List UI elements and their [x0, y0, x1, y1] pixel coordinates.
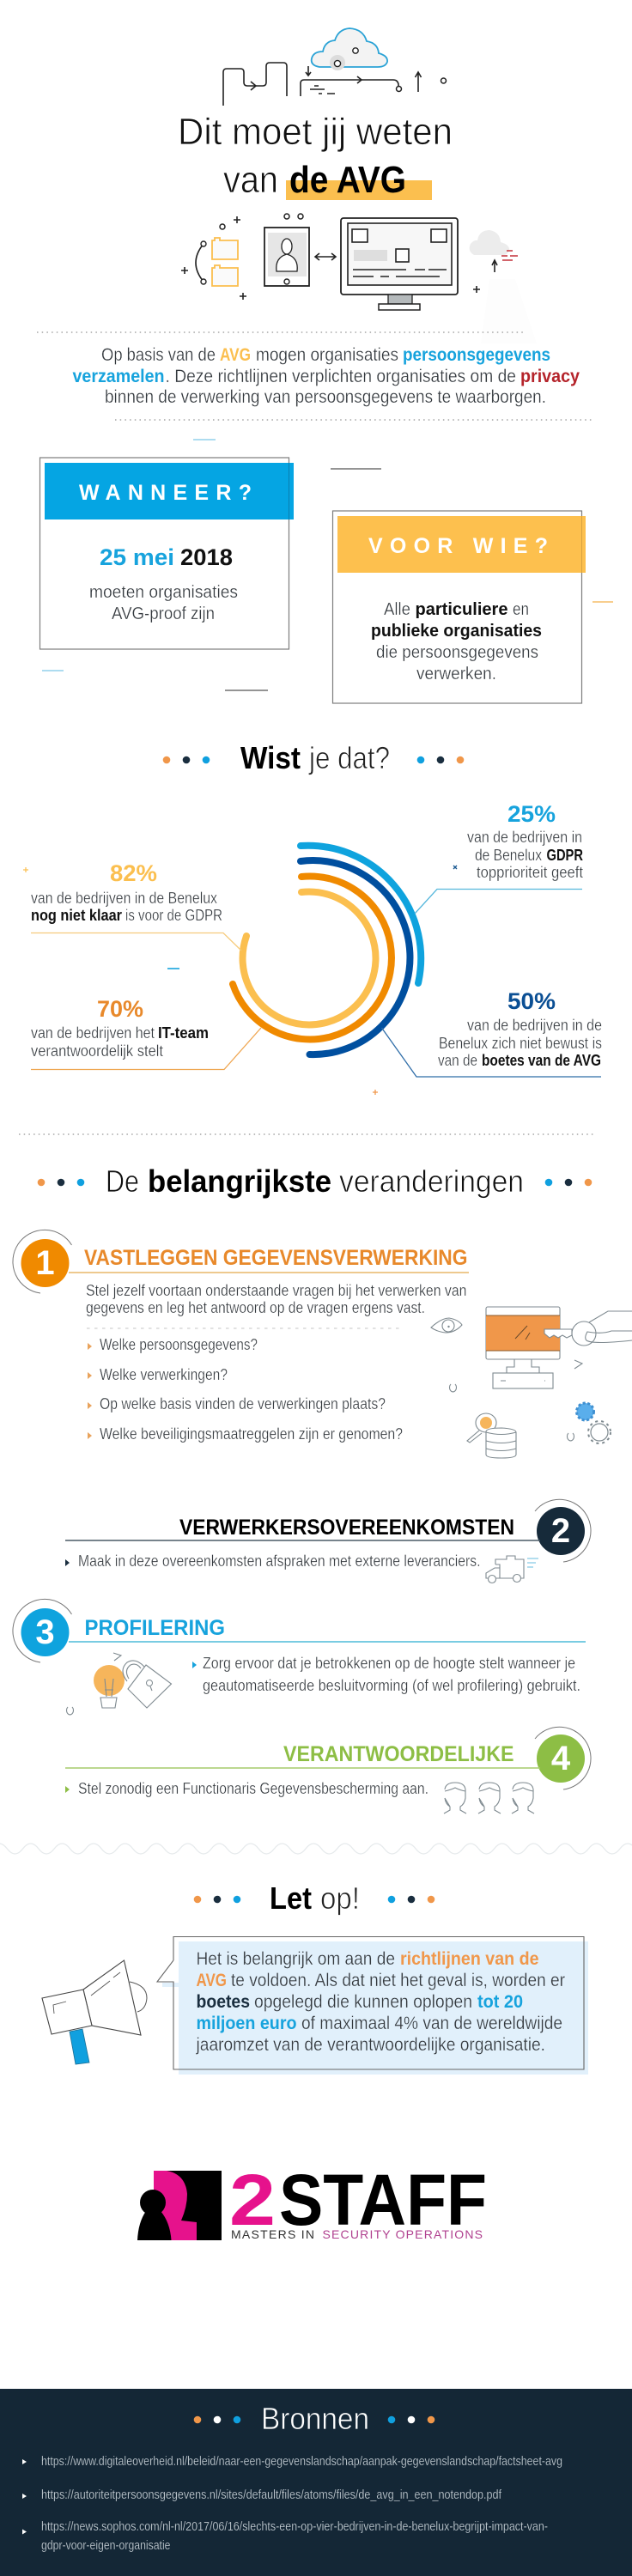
body text 3: geautomatiseerde besluitvorming (of wel profilering) gebruikt. — [203, 1677, 580, 1694]
badge 4: 4 — [551, 1740, 571, 1777]
decorative marks near chart — [23, 866, 457, 1095]
wanneer date: 25 mei — [100, 544, 174, 570]
heading 3: PROFILERING — [84, 1616, 225, 1640]
stat: 70% — [31, 996, 261, 1070]
icon: monitor with key — [486, 1307, 632, 1388]
question list: Welke beveiligingsmaatreggelen zijn er genomen? — [100, 1425, 403, 1443]
title: van — [223, 159, 278, 201]
voor wie text: die persoonsgegevens — [376, 643, 538, 662]
wanneer text — [89, 583, 238, 623]
wanneer header: WANNEER? — [79, 481, 252, 505]
heading: bronnen: Bronnen — [261, 2401, 369, 2436]
wanneer text: moeten organisaties — [89, 583, 238, 602]
heading: let op — [194, 1880, 434, 1916]
stat: 82%: nog niet klaar — [31, 907, 122, 924]
voor wie text — [371, 600, 542, 683]
title: Dit moet jij weten — [178, 111, 453, 153]
voor wie header — [337, 516, 586, 573]
logo wordmark: 2 — [229, 2160, 276, 2240]
intro text: verzamelen — [72, 367, 165, 386]
stat: 70%: verantwoordelijk stelt — [31, 1042, 163, 1060]
heading: bronnen — [194, 2401, 434, 2436]
voor wie text: Alle — [384, 600, 410, 619]
heading: let op: op! — [320, 1880, 360, 1916]
question list: Op welke basis vinden de verwerkingen plaats? — [100, 1395, 386, 1413]
voor wie text: en — [513, 600, 529, 619]
title: de AVG — [289, 159, 406, 201]
voor wie text: particuliere — [416, 600, 508, 619]
callout: let op: tot 20 — [477, 1992, 523, 2012]
badge 2: 2 — [551, 1512, 570, 1550]
stat: 70%: 70% — [97, 996, 143, 1022]
logo mark — [137, 2171, 222, 2240]
logo: 2staff — [137, 2160, 487, 2241]
body text 1: gegevens en leg het antwoord op de vragen ergens vast. — [86, 1299, 425, 1316]
heading: wist je dat — [163, 740, 464, 775]
question list: Welke persoonsgegevens? — [100, 1336, 258, 1353]
stat: 50%: Benelux zich niet bewust is — [439, 1035, 602, 1052]
body text 4: Stel zonodig een Functionaris Gegevensbescherming aan. — [78, 1780, 428, 1797]
source list: https://news.sophos.com/nl-nl/2017/06/16/slechts-een-op-vier-bedrijven-in-de-benelux-begrijpt-impact-van- — [41, 2520, 548, 2534]
callout: let op: te voldoen. Als dat niet het geval is, worden er — [231, 1971, 565, 1990]
body text 3 — [192, 1655, 580, 1694]
intro text: . Deze richtlijnen verplichten organisaties om de — [165, 367, 516, 386]
stat: 50%: van de bedrijven in de — [467, 1017, 602, 1034]
decorative short lines — [42, 440, 613, 690]
icon: small marks — [450, 1360, 582, 1441]
callout: let op — [157, 1937, 588, 2075]
heading: de belangrijkste veranderingen: veranderingen — [339, 1163, 524, 1199]
stat: 50%: boetes van de AVG — [482, 1052, 601, 1069]
badge 1: 1 — [35, 1244, 55, 1282]
divider dotted middle — [19, 1133, 596, 1135]
icon: bulb and lock — [66, 1653, 172, 1715]
stat: 50%: van de — [438, 1052, 477, 1069]
intro text: AVG — [220, 345, 251, 365]
icon: eye — [431, 1318, 462, 1333]
heading 4: VERANTWOORDELIJKE — [283, 1742, 514, 1766]
callout: let op: of maximaal 4% van de wereldwijde — [301, 2014, 562, 2033]
stat: 70%: van de bedrijven het — [31, 1024, 155, 1042]
stat: 25% — [415, 801, 583, 914]
callout: let op: Het is belangrijk om aan de — [196, 1949, 395, 1969]
logo tagline — [231, 2227, 483, 2241]
divider wave — [0, 1844, 632, 1854]
title highlight — [286, 180, 432, 200]
stat: 70%: IT-team — [158, 1024, 209, 1042]
body text 1 — [86, 1282, 467, 1316]
heading: de belangrijkste veranderingen: belangrijkste — [148, 1163, 331, 1199]
callout: let op: jaaromzet van de verantwoordelijke organisatie. — [196, 2035, 545, 2055]
callout: let op: richtlijnen van de — [400, 1949, 539, 1969]
badge 3 — [13, 1599, 71, 1662]
stat: 25%: van de bedrijven in — [467, 829, 582, 846]
voor wie text: verwerken. — [416, 665, 496, 683]
heading: de belangrijkste veranderingen: De — [106, 1163, 139, 1199]
callout: let op: opgelegd die kunnen oplopen — [254, 1992, 472, 2012]
panel: step 3 — [13, 1599, 586, 1715]
icon: three faces — [444, 1783, 534, 1814]
stat: 25%: 25% — [507, 801, 556, 827]
icon: truck — [486, 1556, 538, 1583]
wanneer date — [100, 544, 233, 570]
stat: 82%: van de bedrijven in de Benelux — [31, 890, 217, 907]
logo wordmark: STAFF — [279, 2160, 487, 2240]
source list: gdpr-voor-eigen-organisatie — [41, 2539, 170, 2553]
intro text: mogen organisaties — [256, 345, 398, 365]
stat: 25%: topprioriteit geeft — [477, 864, 583, 881]
icon: gears — [577, 1403, 611, 1443]
title — [178, 111, 453, 201]
intro text: binnen de verwerking van persoonsgegevens te waarborgen. — [105, 387, 546, 407]
stat: 82%: 82% — [110, 860, 157, 886]
heading: de belangrijkste veranderingen — [38, 1163, 592, 1199]
intro text: persoonsgegevens — [403, 345, 550, 365]
question list — [88, 1336, 403, 1443]
panel: bronnen footer — [0, 2389, 632, 2576]
body text 1: Stel jezelf voortaan onderstaande vragen bij het verwerken van — [86, 1282, 467, 1299]
heading: wist je dat: Wist — [240, 740, 301, 775]
source list — [22, 2455, 562, 2553]
stat: 50%: 50% — [507, 988, 556, 1014]
stat: 82%: is voor de GDPR — [125, 907, 222, 924]
heading: wist je dat: je dat? — [308, 740, 390, 775]
badge 4 — [535, 1727, 591, 1789]
badge 1 — [13, 1230, 71, 1293]
heading 2: VERWERKERSOVEREENKOMSTEN — [179, 1516, 514, 1540]
chart: concentric radial arcs — [233, 846, 421, 1054]
heading 1: VASTLEGGEN GEGEVENSVERWERKING — [84, 1246, 467, 1270]
heading: let op: Let — [270, 1880, 312, 1916]
intro text: privacy — [520, 367, 580, 386]
divider dotted top — [37, 331, 526, 333]
stat: 50% — [381, 988, 602, 1077]
intro text: Op basis van de — [101, 345, 216, 365]
callout: let op: AVG — [196, 1971, 227, 1990]
badge 2 — [535, 1499, 591, 1562]
logo tagline: SECURITY OPERATIONS — [323, 2227, 483, 2241]
divider dotted bottom — [115, 419, 592, 421]
question list: Welke verwerkingen? — [100, 1366, 228, 1383]
wanneer text: AVG-proof zijn — [112, 605, 215, 623]
icon: megaphone — [42, 1960, 147, 2064]
intro text — [72, 345, 580, 407]
panel: step 4 — [65, 1727, 591, 1814]
voor wie text: publieke organisaties — [371, 622, 542, 641]
body text 2: Maak in deze overeenkomsten afspraken met externe leveranciers. — [78, 1552, 481, 1570]
logo tagline: MASTERS IN — [231, 2227, 314, 2241]
wanneer date: 2018 — [180, 544, 233, 570]
callout: let op: boetes — [196, 1992, 250, 2012]
panel: step 1 — [13, 1230, 632, 1458]
icon: magnifier and database — [467, 1413, 516, 1458]
icon: cloud and network lines — [223, 28, 447, 106]
stat: 25%: de Benelux — [475, 847, 542, 864]
stat: 82% — [31, 860, 241, 951]
panel: wanneer — [40, 458, 294, 649]
badge 3: 3 — [35, 1613, 55, 1651]
voor wie header: VOOR WIE? — [368, 534, 548, 558]
source list: https://autoriteitpersoonsgegevens.nl/sites/default/files/atoms/files/de_avg_in_een_notendop.pdf — [41, 2488, 502, 2502]
callout: let op: miljoen euro — [196, 2014, 297, 2033]
panel: step 2 — [65, 1499, 591, 1583]
stat: 25%: GDPR — [546, 847, 583, 864]
icon: devices illustration — [181, 214, 537, 343]
panel: voor wie — [333, 511, 586, 703]
wanneer header — [45, 463, 294, 519]
body text 3: Zorg ervoor dat je betrokkenen op de hoogte stelt wanneer je — [203, 1655, 575, 1672]
